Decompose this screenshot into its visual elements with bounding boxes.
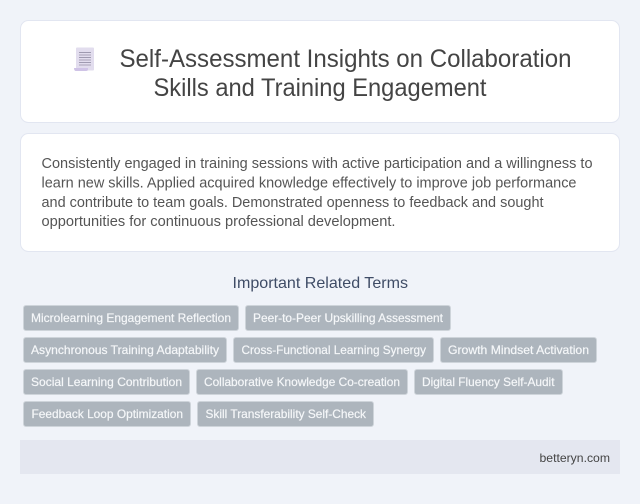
tag	[24, 370, 190, 394]
panel: summary text	[20, 134, 620, 252]
footer bar	[20, 440, 620, 474]
heading: important related terms: Important Related Terms	[232, 275, 408, 292]
panel: title card	[20, 20, 620, 122]
tag	[24, 338, 226, 362]
tag	[246, 306, 450, 330]
title	[120, 45, 572, 102]
tag: Cross-Functional Learning Synergy	[242, 343, 426, 357]
tag	[440, 338, 596, 362]
footer brand: betteryn.com	[540, 451, 610, 465]
summary paragraph	[42, 156, 592, 230]
tag: Peer-to-Peer Upskilling Assessment	[253, 311, 444, 325]
summary paragraph: opportunities for continuous professional development.	[42, 214, 396, 230]
tag	[414, 370, 562, 394]
tag: Collaborative Knowledge Co-creation	[204, 375, 400, 389]
title: Skills and Training Engagement	[154, 74, 486, 102]
summary paragraph: and contribute to team goals. Demonstrated openness to feedback and sought	[42, 195, 544, 211]
tag	[196, 370, 408, 394]
summary paragraph: learn new skills. Applied acquired knowledge effectively to improve job performance	[42, 176, 576, 192]
tag	[198, 402, 374, 426]
tag: Microlearning Engagement Reflection	[31, 311, 231, 325]
tag: Asynchronous Training Adaptability	[31, 343, 219, 357]
tag	[24, 306, 238, 330]
tag: Digital Fluency Self-Audit	[422, 375, 555, 389]
tag group: related terms	[24, 306, 596, 426]
title: Self-Assessment Insights on Collaboration	[120, 45, 572, 73]
tag: Social Learning Contribution	[31, 375, 182, 389]
tag: Growth Mindset Activation	[448, 343, 589, 357]
tag: Feedback Loop Optimization	[32, 407, 183, 421]
tag: Skill Transferability Self-Check	[206, 407, 366, 421]
tag	[24, 402, 190, 426]
tag	[234, 338, 434, 362]
summary paragraph: Consistently engaged in training sessions with active participation and a willingness to	[42, 156, 592, 172]
icon: document scroll	[74, 48, 94, 71]
